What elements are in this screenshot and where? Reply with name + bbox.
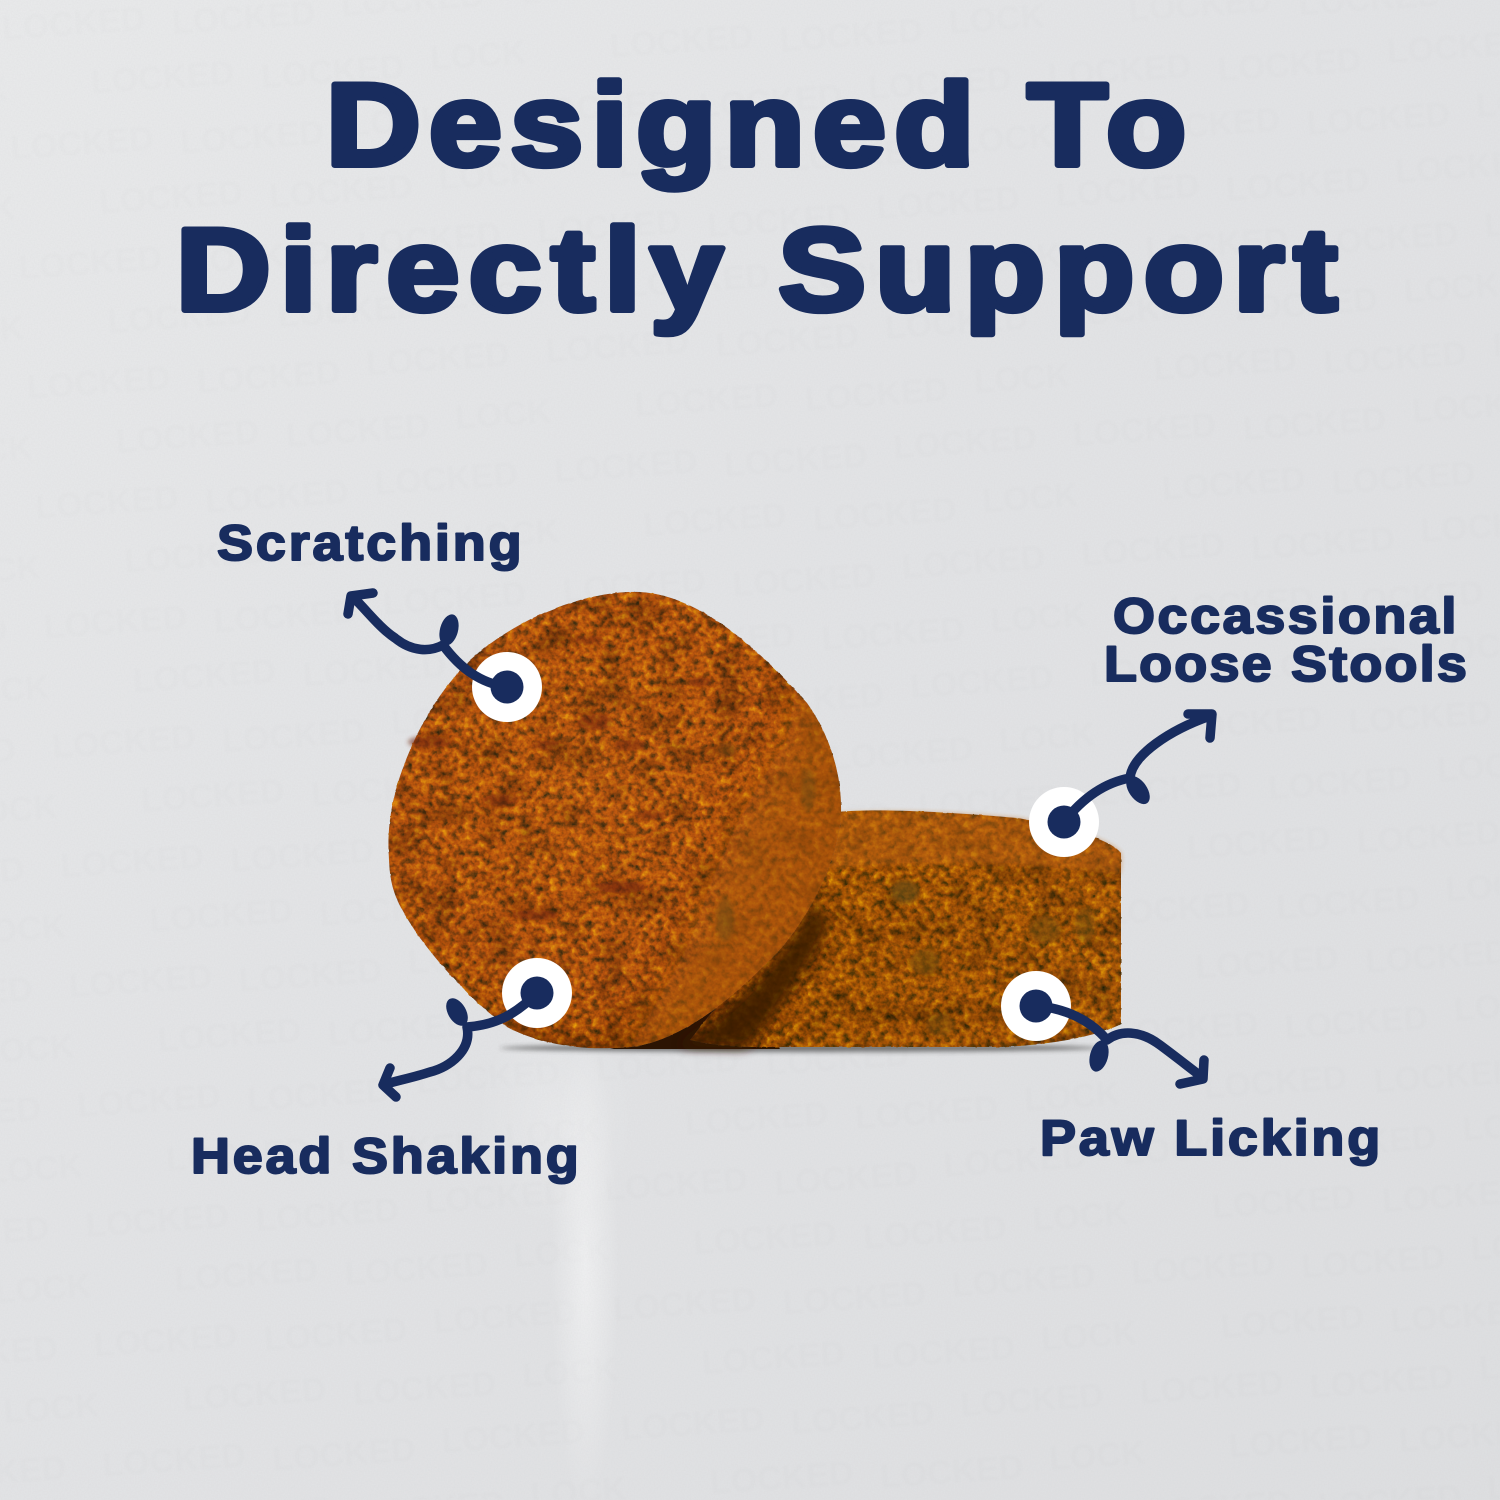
callout: Paw Licking bbox=[1001, 971, 1380, 1167]
callout: Head Shaking bbox=[191, 958, 579, 1185]
callout: Occasional Loose Stools: Loose Stools bbox=[1104, 637, 1467, 693]
label: Paw Licking bbox=[1040, 1111, 1380, 1167]
title bbox=[176, 60, 1337, 335]
chew: lying tablet (rear) bbox=[500, 810, 1121, 1052]
product: two orange chews bbox=[388, 592, 1121, 1060]
chew: standing tablet (front) bbox=[388, 592, 880, 1060]
label: Scratching bbox=[217, 516, 522, 572]
callout: Scratching bbox=[217, 516, 542, 722]
label: Head Shaking bbox=[191, 1129, 579, 1185]
title: Designed To bbox=[326, 60, 1186, 190]
label: Occassional bbox=[1113, 589, 1456, 645]
title: Directly Support bbox=[176, 205, 1337, 335]
callout: Occasional Loose Stools bbox=[1029, 589, 1467, 857]
